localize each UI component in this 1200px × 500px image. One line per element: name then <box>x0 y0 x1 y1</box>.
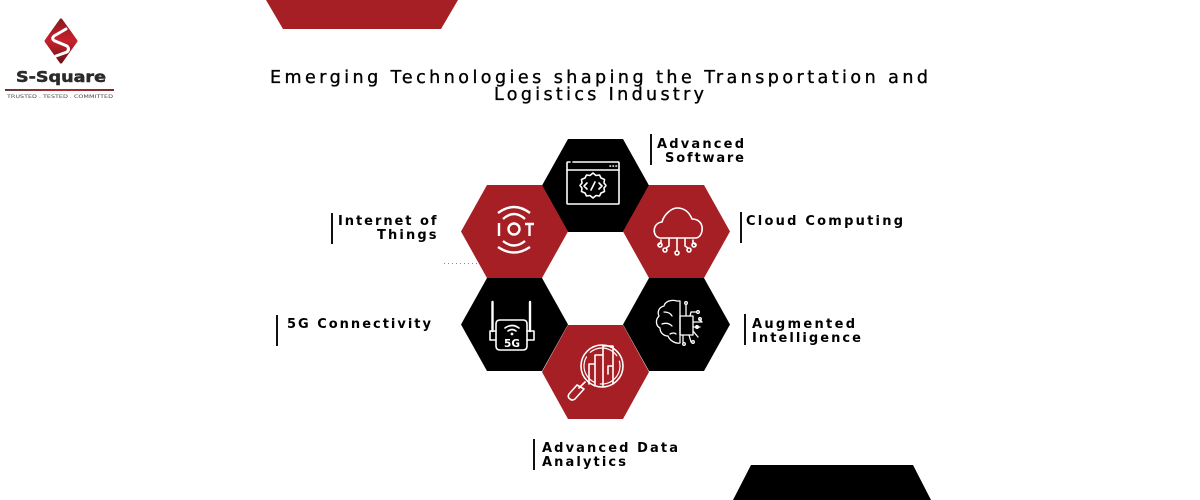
label: Cloud Computing: Cloud Computing <box>746 214 903 229</box>
label: Advanced Software: Software <box>665 151 744 166</box>
title: Logistics Industry <box>494 85 704 105</box>
icon: cloud circuit <box>654 208 702 255</box>
icon: IoT signal <box>498 207 534 252</box>
label: Augmented Intelligence: Augmented <box>752 317 855 332</box>
icon: AI brain chip <box>656 300 702 345</box>
logo wordmark: S-Square <box>16 68 106 86</box>
hexagon: 5G connectivity <box>461 278 568 371</box>
decorative dotted line <box>444 262 480 264</box>
label: Advanced Data Analytics <box>533 439 678 470</box>
label: Augmented Intelligence: Intelligence <box>752 331 861 346</box>
label: Advanced Data Analytics: Analytics <box>542 455 626 470</box>
label: Advanced Software <box>650 134 744 166</box>
hexagon: augmented intelligence <box>623 278 730 371</box>
decorative top red trapezoid <box>266 0 458 29</box>
logo: S-Square <box>5 20 114 100</box>
title: Emerging Technologies shaping the Transportation and <box>270 68 928 88</box>
hexagon: internet of things <box>461 185 568 278</box>
logo tagline: TRUSTED . TESTED . COMMITTED <box>6 94 114 100</box>
hexagon: cloud computing <box>623 185 730 278</box>
label: Internet of Things: Things <box>377 228 437 243</box>
label: Advanced Software: Advanced <box>657 137 744 152</box>
label: Internet of Things <box>331 213 437 244</box>
icon: magnifier with bars <box>568 345 623 400</box>
label: Internet of Things: Internet of <box>338 214 437 229</box>
icon: code window <box>567 162 619 204</box>
logo diamond mark <box>46 20 76 62</box>
icon: 5G router: 5G <box>504 338 520 350</box>
decorative bottom black trapezoid <box>733 465 931 500</box>
hexagon: advanced data analytics <box>542 325 649 419</box>
hexagon: advanced software <box>542 139 649 232</box>
title <box>270 68 928 105</box>
label: Augmented Intelligence <box>744 314 861 346</box>
label: 5G Connectivity: 5G Connectivity <box>287 317 432 332</box>
label: Advanced Data Analytics: Advanced Data <box>542 441 678 456</box>
logo rule <box>5 89 114 91</box>
